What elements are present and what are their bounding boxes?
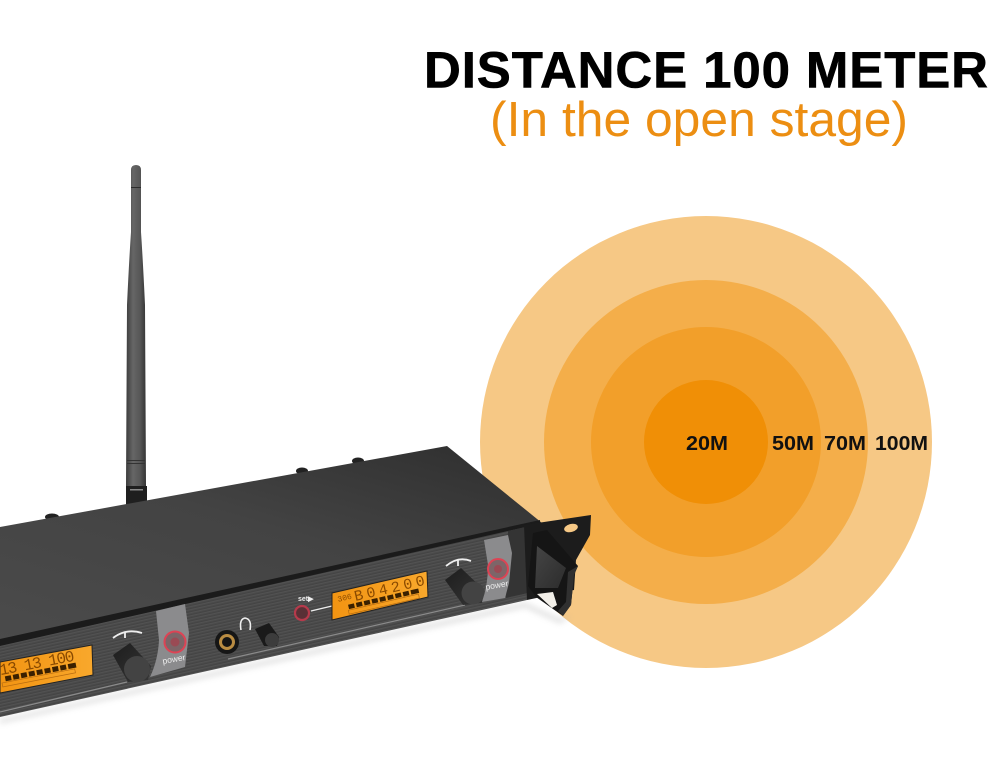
subtitle: (In the open stage) <box>490 93 908 147</box>
label: 50M: 50M <box>772 433 814 455</box>
lower panel line left <box>0 682 127 712</box>
label: 20M: 20M <box>686 433 728 455</box>
right volume knob <box>445 559 484 605</box>
label: 100M: 100M <box>875 433 928 455</box>
right LCD display: B04200 <box>353 573 427 606</box>
right LCD display <box>332 571 428 620</box>
left LCD display: 13 13 100 <box>0 648 76 680</box>
top feet <box>45 458 364 520</box>
top face <box>0 446 542 642</box>
left power plate: power <box>162 652 186 666</box>
right power plate: power <box>485 578 509 592</box>
right LCD display: 306 <box>337 593 353 605</box>
rack ear slot <box>563 522 579 534</box>
headphone level knob <box>255 623 279 647</box>
left LCD display <box>0 645 93 693</box>
rack handle <box>528 530 578 616</box>
front panel right section <box>506 526 530 598</box>
title: DISTANCE 100 METER <box>424 42 988 98</box>
right power plate <box>482 535 512 602</box>
antenna <box>126 165 147 506</box>
left volume knob <box>113 631 151 682</box>
front panel <box>0 526 530 717</box>
headphone icon <box>240 618 250 630</box>
lower panel line centre <box>228 605 465 659</box>
range circles chart <box>480 216 932 668</box>
front dark edge <box>0 520 540 647</box>
set button <box>295 596 332 620</box>
receiver unit <box>0 446 591 724</box>
label: 70M: 70M <box>824 433 866 455</box>
left power plate <box>150 604 189 677</box>
headphone jack <box>215 630 239 654</box>
rack ear <box>524 515 591 600</box>
soft floor shadow <box>0 602 572 724</box>
set button: set▶ <box>298 596 314 603</box>
